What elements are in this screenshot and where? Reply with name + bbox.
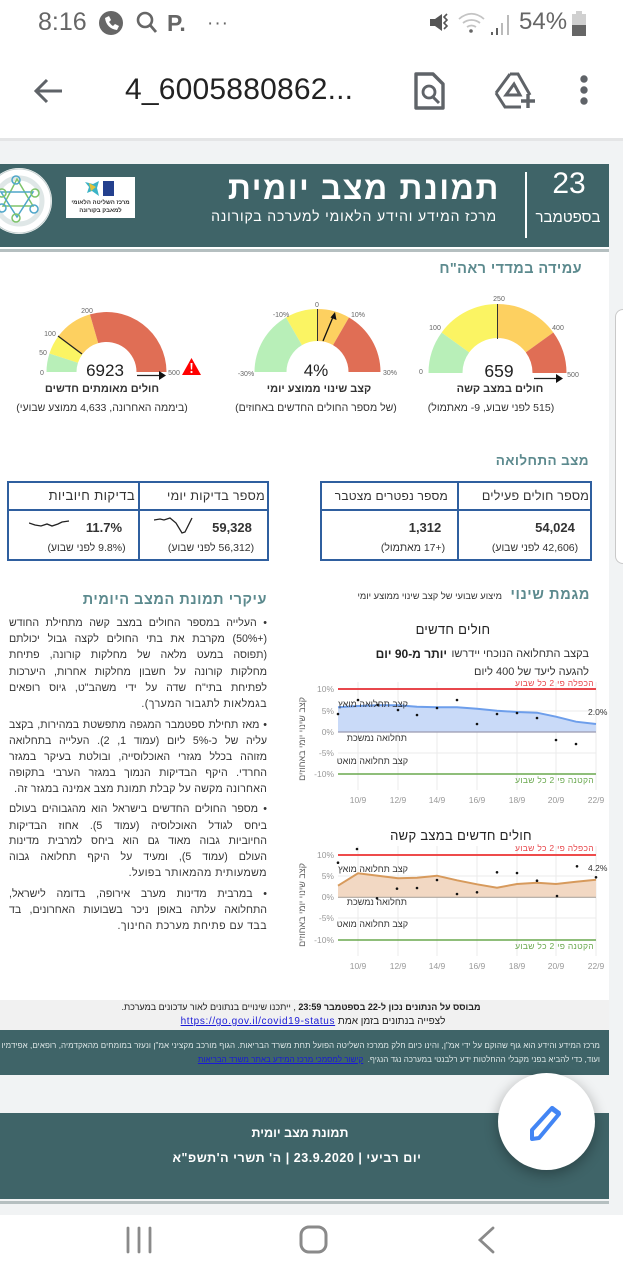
key points text: מחלקות קורונה על חשבון מחלקות אחרות, היערכות xyxy=(9,666,267,678)
line chart: severe cases: 16/9 xyxy=(469,961,486,971)
gauge: new confirmed cases: 500 xyxy=(168,370,180,377)
note: positive rate: (9.8% לפני שבוע) xyxy=(47,542,126,554)
gauge: severe cases: 400 xyxy=(552,325,564,332)
chart note: target: להגעה ליעד של 400 ליום xyxy=(474,666,589,678)
chart title: severe cases: חולים חדשים במצב קשה xyxy=(390,828,532,843)
line chart: severe cases: קצב תחלואה מואט xyxy=(337,919,408,929)
header banner xyxy=(0,164,609,252)
status bar: 54% xyxy=(519,8,567,35)
line chart: severe cases xyxy=(297,843,608,971)
about link line: ועוד, כדי להביא בפני מקבלי ההחלטות ידע רלבנטי במערכה נגד הנגיף. קישור למסמכי מרכז המידע באתר משרד הבריאות xyxy=(198,1055,600,1064)
chart note: days bold: יותר מ-90 יום xyxy=(376,647,447,661)
trend subtitle: מיצוע שבועי של קצב שינוי ממוצע יומי xyxy=(357,591,502,601)
column heading: מספר נפטרים מצטבר xyxy=(335,489,448,503)
gauge: new confirmed cases: 200 xyxy=(81,308,93,315)
line chart: new cases: 5% xyxy=(322,706,334,716)
gauge: new confirmed cases: 100 xyxy=(44,331,56,338)
nav icons xyxy=(126,1226,494,1254)
line chart: severe cases: 20/9 xyxy=(548,961,565,971)
key points text: מזוהה בכלל מגזרי האוכלוסייה, ובולטת בעיקר במגזר xyxy=(9,751,267,763)
gauge: severe cases xyxy=(419,296,579,414)
section heading: compliance with metrics: עמידה במדדי ראה"ח xyxy=(439,261,582,277)
gauge value: 659 xyxy=(484,361,514,381)
key points text: האחרונה מקשה על קבלת תמונת מצב אמינה במגזר זה. xyxy=(14,783,267,795)
sparkline: tests xyxy=(154,517,192,534)
line chart: severe cases: קצב שינוי יומי באחוזים xyxy=(297,863,307,947)
line chart: new cases: 12/9 xyxy=(390,795,407,805)
line chart: new cases: קצב תחלואה מואץ xyxy=(338,699,408,709)
line chart: severe cases: 12/9 xyxy=(390,961,407,971)
line chart: new cases xyxy=(297,678,608,805)
gauge: severe cases: 100 xyxy=(429,325,441,332)
line chart: new cases: תחלואה נמשכת xyxy=(347,733,407,743)
header divider xyxy=(525,172,527,238)
gauge: new confirmed cases xyxy=(16,308,201,414)
line chart: severe cases: 14/9 xyxy=(429,961,446,971)
status bar: P. xyxy=(167,10,186,36)
line chart: severe cases: קצב תחלואה מואץ xyxy=(338,864,408,874)
line chart: new cases: 22/9 xyxy=(588,795,605,805)
subtitle: מרכז המידע והידע הלאומי למערכה בקורונה xyxy=(211,208,497,224)
section heading: key points: עיקרי תמונת המצב היומית xyxy=(83,592,267,608)
value: positive rate: 11.7% xyxy=(86,520,122,535)
gauge: daily change rate: -10% xyxy=(273,312,289,319)
ministry logo xyxy=(66,177,135,218)
key points text: החרדי. היקף הבדיקות הנמוך במגזר הערבי בתקופה xyxy=(9,767,267,779)
key points text: החיוביות גבוה מאוד גם הוא ביחס למרבית מדינות xyxy=(9,835,267,847)
back arrow xyxy=(34,79,62,103)
key points text: בגמלאות לתגבור המערך). xyxy=(141,698,267,710)
gauge: severe cases: 500 xyxy=(567,372,579,379)
gauge caption: קצב שינוי ממוצע יומי xyxy=(267,383,371,395)
key points text: (תפוסה במעט מלאה של מחלקות קורונה, פתיחת xyxy=(9,649,267,661)
pencil icon xyxy=(530,1106,562,1141)
date number: 23 xyxy=(552,167,586,200)
key points text: • במרבית מדינות מערב אירופה, בדומה לישראל, xyxy=(9,888,267,900)
key points text: (+50%) מקרבת את בתי החולים לקצה גבול יכולתם xyxy=(9,633,267,645)
note: daily tests: (56,312 לפני שבוע) xyxy=(168,542,254,554)
gauge: severe cases: 0 xyxy=(419,369,423,376)
key points text: העולם (עמוד 5), ומעיד על היקף תחלואה גבוה xyxy=(9,851,267,863)
teal about block: מרכז המידע והידע הוא גוף שהוקם על ידי אמ"ן, והינו כיום חלק ממרכז השליטה הפועל תחת משרד הבריאות. הגוף מורכב מקציני אמ"ן ונעזר במומחים מהאקדמיה, רופאים, אפידמיו xyxy=(1,1041,600,1050)
key points text xyxy=(9,617,267,932)
line chart: new cases: הכפלה פי 2 כל שבוע xyxy=(515,678,594,688)
banner date: יום רביעי | 23.9.2020 | ה' תשרי ה'תשפ"א xyxy=(172,1151,422,1165)
next page banner xyxy=(0,1113,609,1204)
line chart: severe cases: הכפלה פי 2 כל שבוע xyxy=(515,843,594,853)
line chart: new cases: -5% xyxy=(319,748,334,758)
line chart: new cases: 2.0% xyxy=(588,707,608,717)
line chart: new cases: 10/9 xyxy=(350,795,367,805)
ministry logo: למאבק בקורונה xyxy=(79,208,122,214)
key points text: בבד עם פתיחת מערכת החינוך. xyxy=(118,920,267,932)
value: daily tests: 59,328 xyxy=(212,520,252,535)
page white sheet xyxy=(0,164,609,1000)
section heading: trend: מגמת שינוי xyxy=(510,587,590,603)
gauge: new confirmed cases: 0 xyxy=(40,370,44,377)
circular logo xyxy=(0,168,52,234)
gauge caption: חולים מאומתים חדשים xyxy=(45,383,159,395)
key points text: לפתיחת בתי"ח שדה על ידי משהב"ט, גיוס רופאים xyxy=(9,682,267,694)
key points text: • העלייה במספר החולים במצב קשה מתחילת החודש xyxy=(9,617,267,629)
key points text: • מאז תחילת ספטמבר המגפה מתפשטת במהירות, בקצב xyxy=(9,719,267,731)
line chart: new cases: -10% xyxy=(314,769,334,779)
chart note: current rate: בקצב התחלואה הנוכחי יידרשו xyxy=(451,648,589,660)
line chart: severe cases: 5% xyxy=(322,871,334,881)
column heading: מספר בדיקות יומי xyxy=(167,489,265,503)
footer data note: מבוסס על הנתונים נכון ל-22 בספטמבר 23:59 , ייתכנו שינויים בנתונים לאור עדכונים במערכת. xyxy=(121,1002,481,1012)
line chart: new cases: הקטנה פי 2 כל שבוע xyxy=(515,775,594,785)
table: active cases and deaths xyxy=(320,481,592,561)
sparkline: positive rate xyxy=(29,520,70,527)
gauge: severe cases: 250 xyxy=(493,296,505,303)
key points text: ביחס לגודל האוכלוסיה (עמוד 5). אחוז הבדיקות xyxy=(9,820,267,832)
line chart: severe cases: 4.2% xyxy=(588,863,608,873)
value: deaths: 1,312 xyxy=(409,520,441,535)
teal about block xyxy=(0,1030,609,1075)
gauge note: (515 לפני שבוע, 9- מאתמול) xyxy=(428,402,554,414)
app bar icons xyxy=(414,72,588,110)
line chart: new cases: קצב שינוי יומי באחוזים xyxy=(297,697,307,781)
line chart: severe cases: תחלואה נמשכת xyxy=(347,897,407,907)
table: tests and positive rate xyxy=(7,481,269,561)
gauge note: (של מספר החולים החדשים באחוזים) xyxy=(235,402,397,414)
line chart: severe cases: 10/9 xyxy=(350,961,367,971)
key points text: • מספר החולים החדשים בישראל הוא מהגבוהים בעולם xyxy=(9,803,267,815)
note: active cases: (42,606 לפני שבוע) xyxy=(492,542,578,554)
section heading: morbidity status: מצב התחלואה xyxy=(496,453,589,468)
value: active cases: 54,024 xyxy=(535,520,575,535)
line chart: new cases: 16/9 xyxy=(469,795,486,805)
app bar xyxy=(0,46,623,141)
line chart: severe cases: -5% xyxy=(319,913,334,923)
gauge: new confirmed cases: 50 xyxy=(39,350,47,357)
gauge note: (ביממה האחרונה, 4,633 ממוצע שבועי) xyxy=(16,402,188,414)
line chart: severe cases: 22/9 xyxy=(588,961,605,971)
gauge: daily change rate: 0 xyxy=(315,302,319,309)
column heading: מספר חולים פעילים xyxy=(482,489,589,503)
gauge: daily change rate: -30% xyxy=(238,371,254,378)
bottom navigation bar xyxy=(0,1215,623,1280)
status bar: 8:16 xyxy=(38,8,87,36)
line chart: severe cases: 10% xyxy=(317,850,334,860)
file name: 4_6005880862... xyxy=(125,73,353,106)
line chart: new cases: קצב תחלואה מואט xyxy=(337,756,408,766)
scroll indicator card xyxy=(615,309,623,564)
key points text: התחלואה עלתה באופן ניכר בשבועות האחרונים, בד xyxy=(9,904,267,916)
chart title: new cases: חולים חדשים xyxy=(416,622,490,637)
line chart: new cases: 10% xyxy=(317,684,334,694)
gauge: daily change rate xyxy=(235,302,397,414)
main title: תמונת מצב יומית xyxy=(228,170,500,206)
line chart: new cases: 18/9 xyxy=(509,795,526,805)
line chart: severe cases: -10% xyxy=(314,935,334,945)
line chart: severe cases: הקטנה פי 2 כל שבוע xyxy=(515,941,594,951)
ministry logo: מרכז השליטה הלאומי xyxy=(71,200,130,206)
gauge value: 4% xyxy=(304,361,328,380)
gauge value: 6923 xyxy=(86,361,124,380)
banner title: תמונת מצב יומית xyxy=(252,1126,348,1140)
status bar xyxy=(38,8,586,36)
line chart: new cases: 14/9 xyxy=(429,795,446,805)
floating edit button xyxy=(498,1073,595,1170)
key points text: משמעותית מהמאותר בפועל. xyxy=(129,867,267,879)
footer link: לצפייה בנתונים בזמן אמת https://go.gov.il/covid19-status xyxy=(181,1016,445,1027)
line chart: severe cases: 0% xyxy=(322,892,334,902)
line chart: new cases: 0% xyxy=(322,727,334,737)
line chart: new cases: 20/9 xyxy=(548,795,565,805)
gauge caption: חולים במצב קשה xyxy=(457,383,543,395)
note: deaths: (+17 מאתמול) xyxy=(381,542,445,554)
footer data note xyxy=(0,1000,609,1030)
column heading: בדיקות חיוביות xyxy=(49,488,135,503)
line chart: severe cases: 18/9 xyxy=(509,961,526,971)
gauge: daily change rate: 10% xyxy=(351,312,365,319)
status bar: ··· xyxy=(207,13,229,34)
date month: בספטמבר xyxy=(536,209,600,226)
gauge: daily change rate: 30% xyxy=(383,370,397,377)
key points text: עליה של כ-5% ליום (עמוד 1, 2). העלייה בתחלואה xyxy=(9,735,267,747)
